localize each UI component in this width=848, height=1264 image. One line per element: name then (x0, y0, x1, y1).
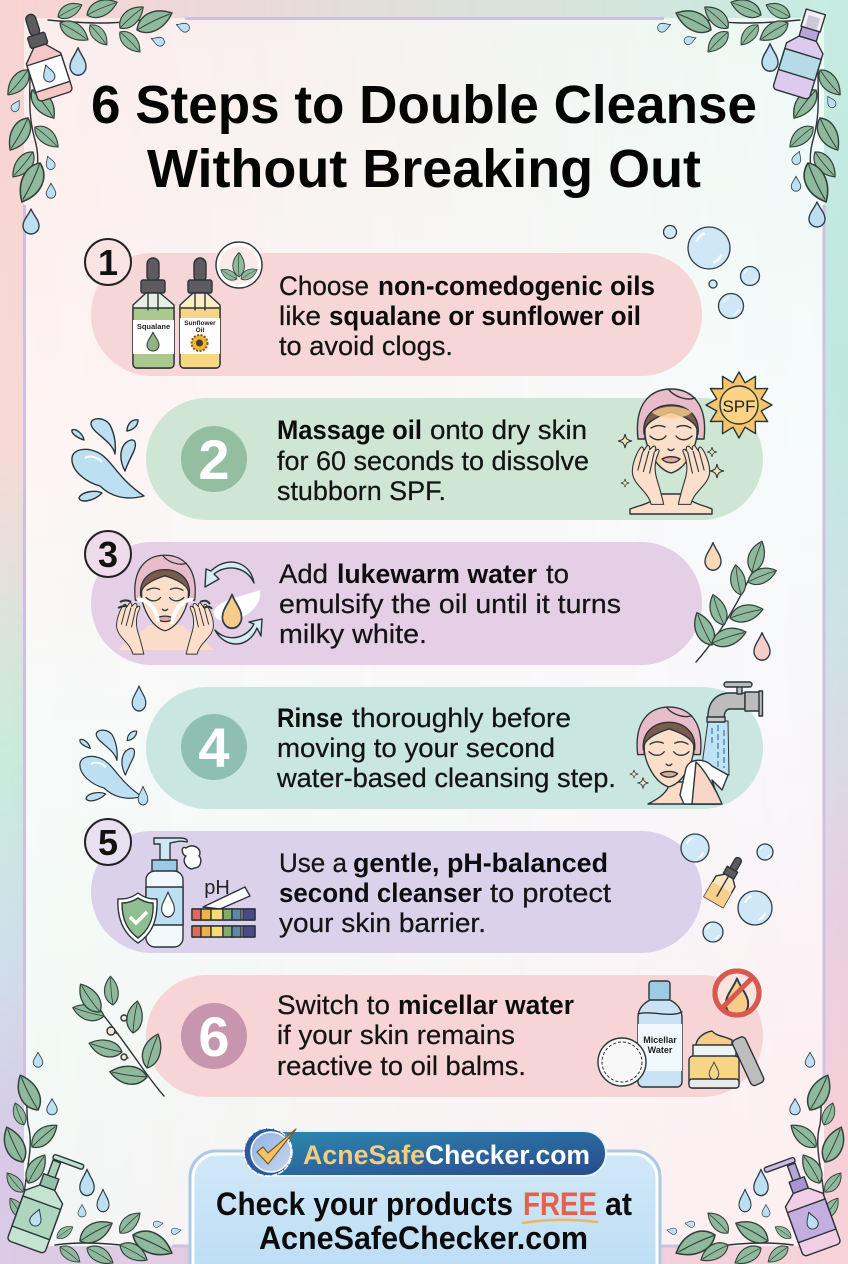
icon: woman massaging face (618, 389, 724, 514)
panel: step 1 (85, 239, 702, 376)
icon: SPF sun (706, 372, 772, 438)
icon: dropper bottle (12, 9, 73, 102)
icon: sunflower oil bottle: Oil (196, 327, 205, 334)
icon: woman washing face (117, 555, 214, 654)
icon: sunflower oil bottle: Sunflower (184, 320, 216, 327)
step 2 text: stubborn SPF. (277, 476, 446, 506)
step 4 text: water-based cleansing step. (276, 763, 616, 793)
icon: verified seal (244, 1128, 296, 1176)
panel: step 5 (85, 819, 702, 953)
icon: droplets (33, 1052, 182, 1235)
step 4 text (276, 703, 616, 793)
title: Without Breaking Out (147, 139, 701, 199)
step 4 number: 4 (198, 716, 230, 779)
step 6 text: reactive to oil balms. (277, 1051, 526, 1081)
step 5 text: to protect (490, 878, 612, 908)
icon: droplets (132, 686, 148, 805)
title: 6 Steps to Double Cleanse (91, 75, 757, 135)
step 2 text: onto dry skin (430, 415, 587, 445)
icon: lilac pump bottle (764, 1152, 841, 1259)
icon: squalane bottle: Squalane (137, 322, 170, 331)
title (91, 75, 757, 199)
icon: cotton pad (598, 1038, 646, 1086)
icon: micellar water bottle (638, 981, 682, 1087)
icon: cream jar (689, 1031, 765, 1088)
step 3 text: lukewarm water (337, 559, 537, 589)
step 4 number (181, 714, 247, 780)
step 5 text (279, 848, 612, 938)
step 3 pill (91, 542, 702, 665)
step 1 text: Choose (279, 271, 369, 301)
step 2 number: 2 (198, 428, 230, 491)
step 5 text: second cleanser (279, 878, 482, 908)
step 2 text (277, 415, 589, 506)
step 5 text: gentle, pH-balanced (353, 848, 608, 878)
corner decoration: top right (656, 0, 846, 227)
icon: squalane bottle (133, 258, 174, 368)
badge: site name: Checker.com (425, 1140, 590, 1170)
step 1 number: 1 (98, 242, 118, 283)
step 6 text: if your skin remains (277, 1020, 515, 1050)
step 4 text: Rinse (277, 703, 343, 733)
icon: mint pump bottle (7, 1149, 84, 1256)
step 1 text: squalane or sunflower oil (329, 301, 641, 331)
icon: faucet with water (702, 682, 762, 775)
step 3 number (85, 531, 131, 577)
step 3 text: Add (279, 559, 328, 589)
step 4 pill (146, 687, 763, 809)
badge: site name (246, 1131, 606, 1176)
step 2 pill (146, 398, 763, 520)
CTA text: Check your products (216, 1186, 513, 1222)
step 5 number (85, 819, 131, 865)
icon: herb branch with oil drops (689, 539, 779, 662)
icon: water splash (72, 419, 144, 501)
panel: step 4 (146, 682, 763, 809)
CTA text (216, 1186, 632, 1256)
step 6 pill (146, 975, 763, 1097)
step 4 text: thoroughly before (352, 703, 571, 733)
step 3 number: 3 (98, 534, 118, 575)
icon: plant seal (216, 242, 262, 288)
panel: step 6 (146, 969, 765, 1097)
step 3 text: emulsify the oil until it turns (279, 589, 621, 619)
step 6 text: micellar water (398, 990, 574, 1020)
step 1 pill (91, 253, 702, 376)
corner decoration: bottom right (666, 1052, 848, 1264)
icon: bubbles and dropper (681, 834, 773, 942)
step 5 pill (91, 831, 702, 953)
step 2 text: Massage oil (277, 415, 422, 445)
CTA box (190, 1151, 660, 1264)
step 6 number: 6 (198, 1005, 230, 1068)
step 6 number (181, 1003, 247, 1069)
panel: step 3 (85, 531, 702, 665)
icon: droplets (656, 20, 837, 227)
step 5 text: Use a (279, 848, 348, 878)
panel: step 2 (146, 372, 772, 520)
icon: woman with towel (630, 707, 728, 804)
step 3 text: to (546, 559, 569, 589)
icon: bubbles (664, 226, 760, 318)
step 1 number (85, 239, 131, 285)
badge: site name: AcneSafe (303, 1140, 425, 1170)
step 5 text: your skin barrier. (279, 908, 486, 938)
icon: shield check (118, 893, 157, 943)
icon: SPF sun: SPF (722, 397, 756, 416)
icon: pH test strips: pH (204, 877, 230, 899)
step 4 text: moving to your second (277, 733, 555, 763)
step 1 text: non-comedogenic oils (378, 271, 655, 301)
icon: cleanser pump bottle (146, 838, 201, 947)
icon: sunflower oil bottle (180, 258, 220, 368)
step 1 text: to avoid clogs. (279, 331, 453, 361)
step 1 text (279, 271, 655, 361)
step 5 number: 5 (98, 822, 118, 863)
step 6 text: Switch to (277, 990, 390, 1020)
step 6 text (277, 990, 574, 1081)
icon: micellar water bottle: Micellar (643, 1035, 677, 1045)
icon: droplets (10, 20, 191, 234)
step 2 text: for 60 seconds to dissolve (277, 446, 589, 476)
icon: micellar water bottle: Water (648, 1045, 673, 1055)
step 1 text: like (279, 301, 321, 331)
step 3 text: milky white. (279, 619, 427, 649)
panel: call to action (190, 1128, 660, 1264)
corner decoration: top left (2, 0, 191, 234)
icon: herb branch (71, 976, 166, 1096)
icon: droplets (666, 1052, 815, 1235)
icon: no oil sign (713, 969, 761, 1017)
CTA text: at (605, 1186, 632, 1222)
CTA text: AcneSafeChecker.com (259, 1220, 588, 1256)
step 3 text (279, 559, 621, 649)
step 2 number (181, 426, 247, 492)
icon: emulsifying oil drop with arrows (205, 562, 262, 644)
icon: pH test strips (192, 877, 255, 937)
CTA text: FREE (523, 1186, 597, 1222)
corner decoration: bottom left (0, 1052, 182, 1264)
icon: spray bottle (773, 6, 834, 100)
icon: water splash (80, 730, 142, 801)
